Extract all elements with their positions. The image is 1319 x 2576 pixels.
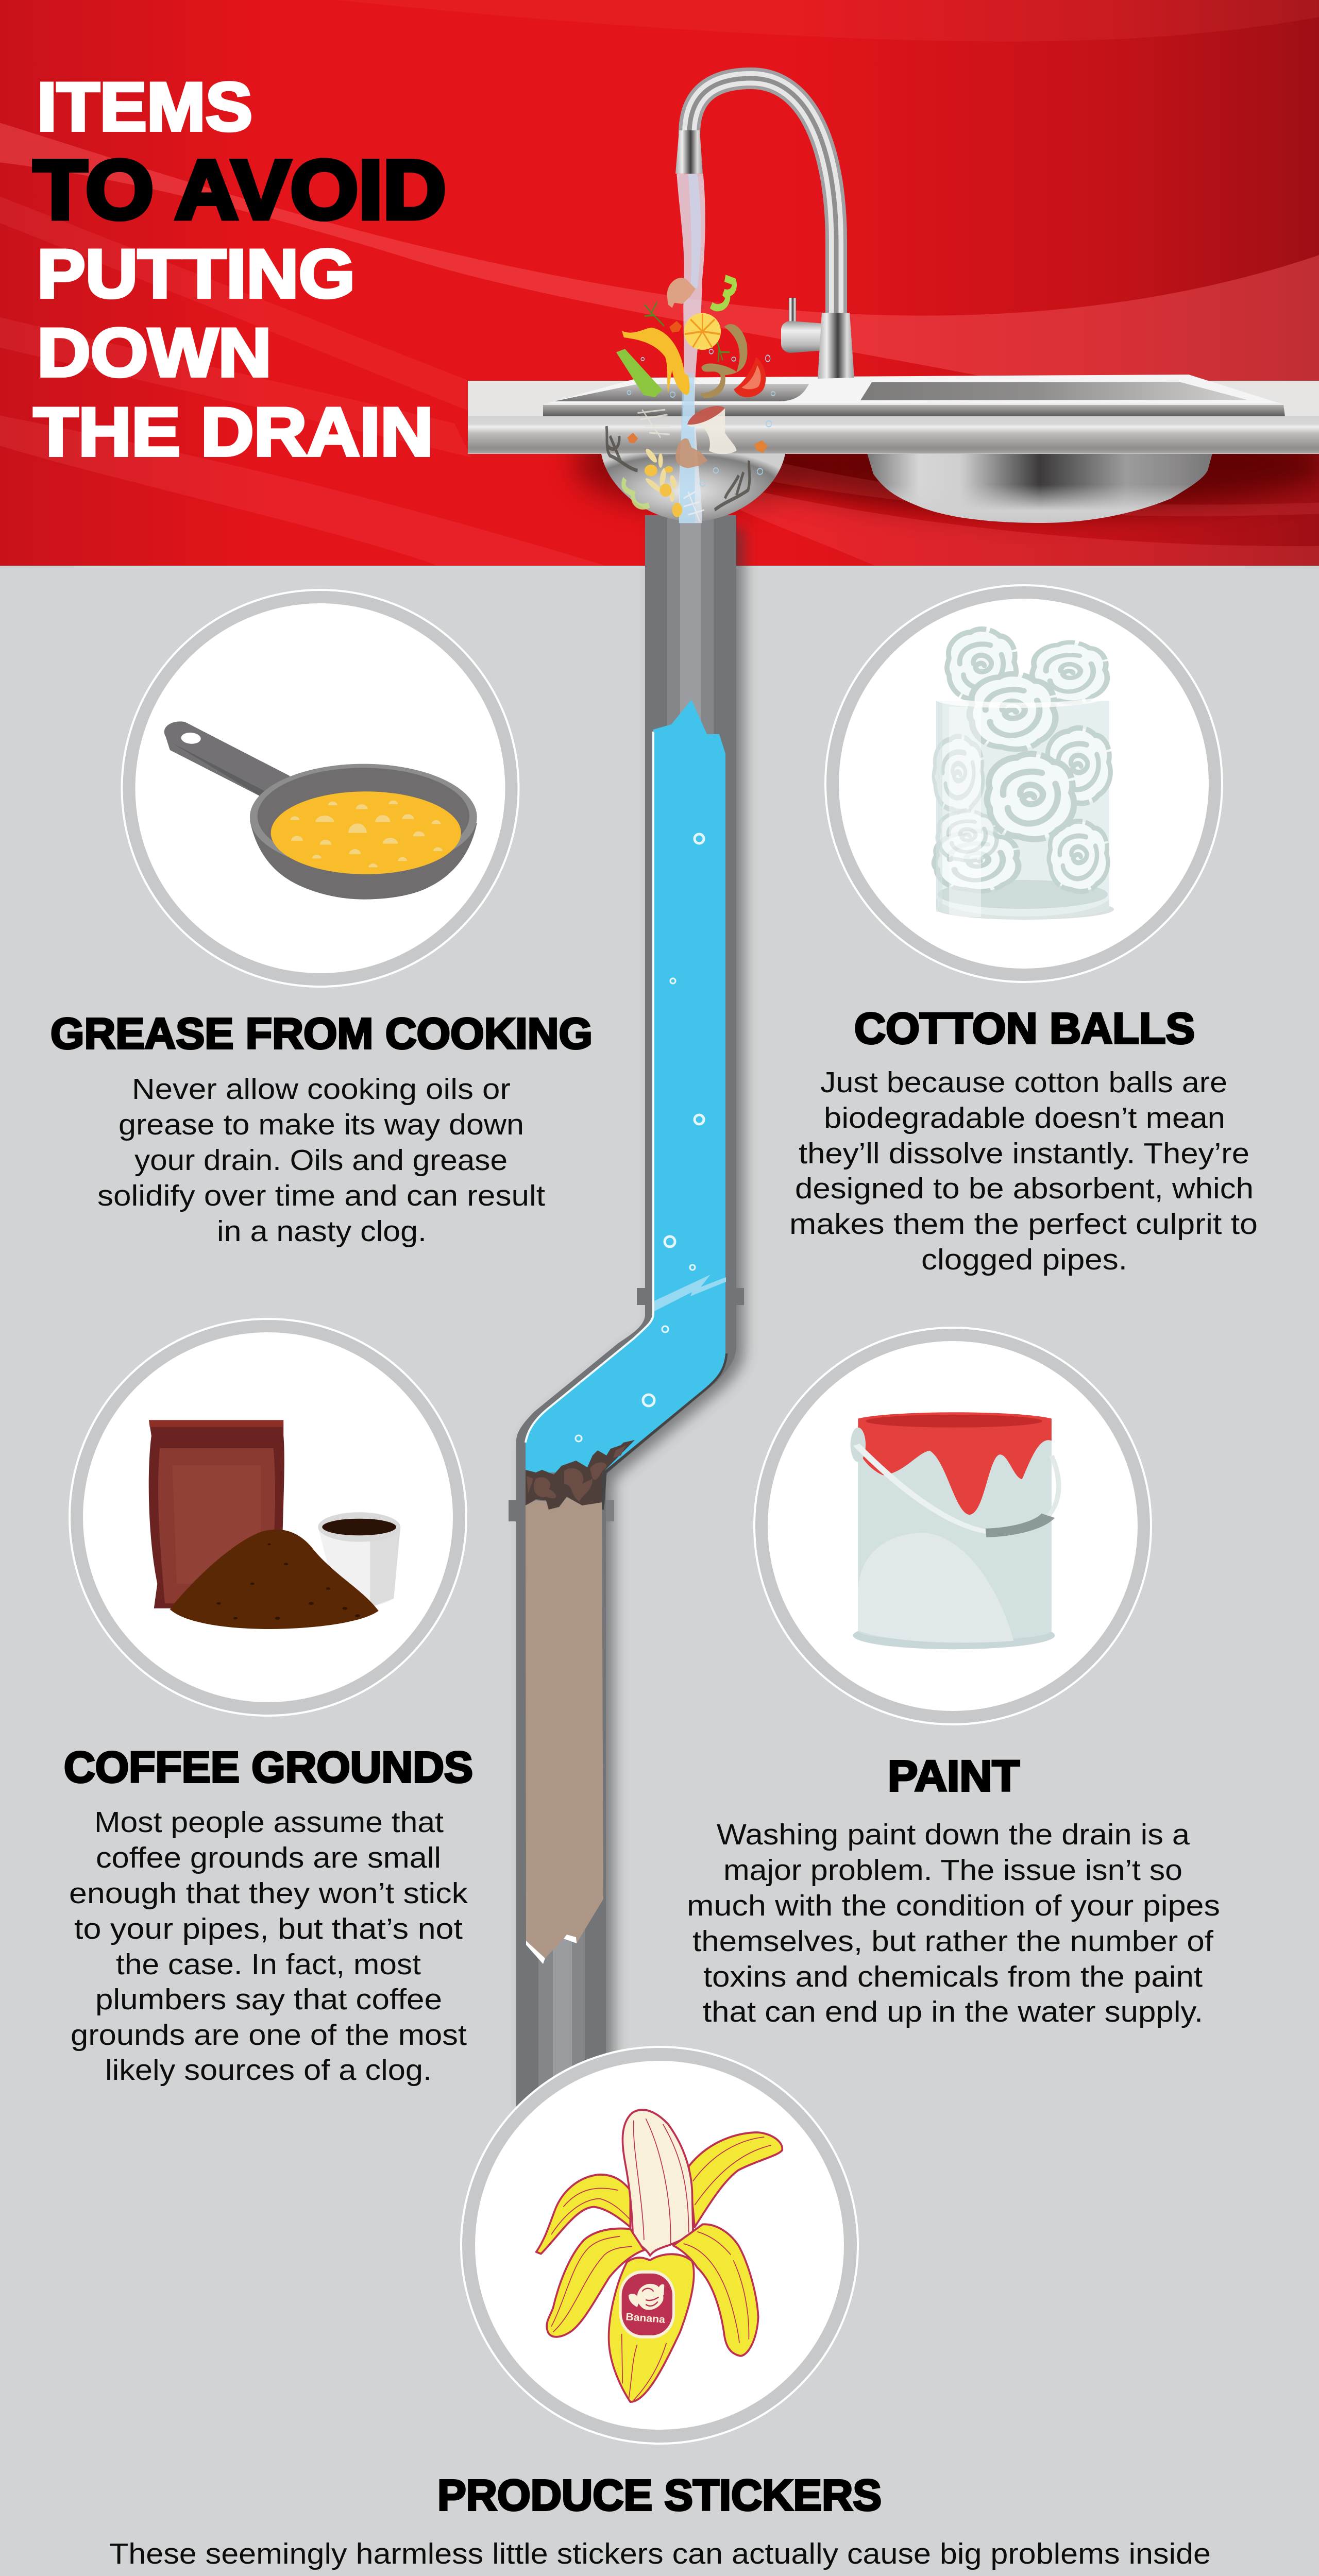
text: cotton description: they’ll dissolve instantly. They’re [799,1137,1249,1170]
text: grease description: Never allow cooking oils or [132,1073,511,1106]
icon: glass of cotton balls [825,585,1222,982]
pipe: water [526,700,726,1510]
scrap: seaweed right [715,461,750,510]
title: THE DRAIN [33,394,433,470]
panel: cotton balls [789,585,1258,1276]
text: coffee description: coffee grounds are small [96,1841,441,1874]
top red header band [0,0,1319,566]
text: grease description: your drain. Oils and grease [134,1144,508,1177]
scrap: apple core [687,406,736,454]
scrap: carrot [669,321,682,332]
panel: coffee grounds [64,1319,473,2087]
icon: banana with sticker [461,2047,858,2444]
icon: coffee bag, grounds and cup [70,1319,466,1716]
text: coffee description: likely sources of a clog. [105,2054,432,2087]
text: coffee description: Most people assume that [94,1806,444,1839]
text: paint description [687,1818,1220,2028]
title: TO AVOID [33,143,446,236]
falling water and food scraps [606,174,775,523]
text: cotton description [789,1066,1258,1276]
scrap: seaweed left [606,426,637,470]
text: cotton description: makes them the perfect culprit to [789,1208,1258,1241]
text: coffee description: the case. In fact, most [116,1948,421,1981]
text: paint description: much with the condition of your pipes [687,1889,1220,1922]
text: grease description: solidify over time and can result [97,1179,545,1212]
heading: grease from cooking: GREASE FROM COOKING [50,1009,593,1058]
title: ITEMS [37,69,252,145]
icon: paint can [754,1328,1151,1724]
drain pipe [509,515,745,2117]
scrap: pepper in bowl [623,479,649,506]
scrap: potato peel [700,324,747,398]
heading: paint: PAINT [888,1752,1020,1800]
scrap: dill [645,302,730,362]
text: paint description: Washing paint down the drain is a [717,1818,1190,1851]
scrap: tomato [734,357,766,397]
sink: under-counter bowls [601,453,1212,523]
heading: coffee grounds: COFFEE GROUNDS [64,1743,473,1791]
panel: paint [687,1328,1220,2028]
text: cotton description: designed to be absorbent, which [795,1172,1254,1205]
title [33,69,446,470]
text: coffee description: to your pipes, but that’s not [74,1912,463,1945]
scrap: bubbles [627,349,775,486]
faucet [675,78,854,379]
text: coffee description: plumbers say that coffee [95,1983,442,2016]
scrap: fish bones [637,410,670,437]
text: coffee description: grounds are one of the most [71,2019,467,2052]
panel: grease from cooking [50,590,593,1248]
text: cotton description: Just because cotton balls are [820,1066,1227,1099]
text: coffee description: enough that they won’t stick [69,1877,468,1910]
text: grease description: grease to make its way down [119,1108,524,1141]
title: DOWN [37,315,272,391]
pipe: coffee clog and brown sludge [526,1440,635,1964]
scrap: banana peel [622,328,706,395]
title: PUTTING [37,236,355,312]
scrap: egg shell in bowl [675,438,708,468]
panel: produce stickers [98,2047,1221,2576]
scrap: carrot pieces [627,433,638,443]
sink [468,78,1319,523]
scrap: pineapple [684,313,721,350]
sink: counter [468,375,1319,454]
text: coffee description [69,1806,468,2087]
text: grease description [97,1073,545,1248]
scrap: egg shell [667,278,696,308]
text: cotton description: clogged pipes. [921,1243,1127,1276]
text: cotton description: biodegradable doesn’t mean [824,1101,1225,1134]
text: paint description: themselves, but rather the number of [692,1925,1213,1958]
scrap: green pepper [711,278,734,308]
text: paint description: that can end up in the water supply. [703,1995,1203,2028]
text: produce description: These seemingly harmless little stickers can actually cause big problems inside [109,2537,1211,2570]
text: grease description: in a nasty clog. [217,1215,427,1248]
scrap: celery [616,349,663,397]
heading: cotton balls: COTTON BALLS [854,1004,1195,1053]
text: paint description: major problem. The issue isn’t so [723,1854,1182,1887]
icon: banana with sticker: Banana [625,2311,666,2326]
text: paint description: toxins and chemicals from the paint [703,1960,1203,1993]
heading: produce stickers: PRODUCE STICKERS [437,2471,882,2519]
scrap: pasta and corn [645,447,678,502]
icon: frying pan with grease [122,590,518,987]
